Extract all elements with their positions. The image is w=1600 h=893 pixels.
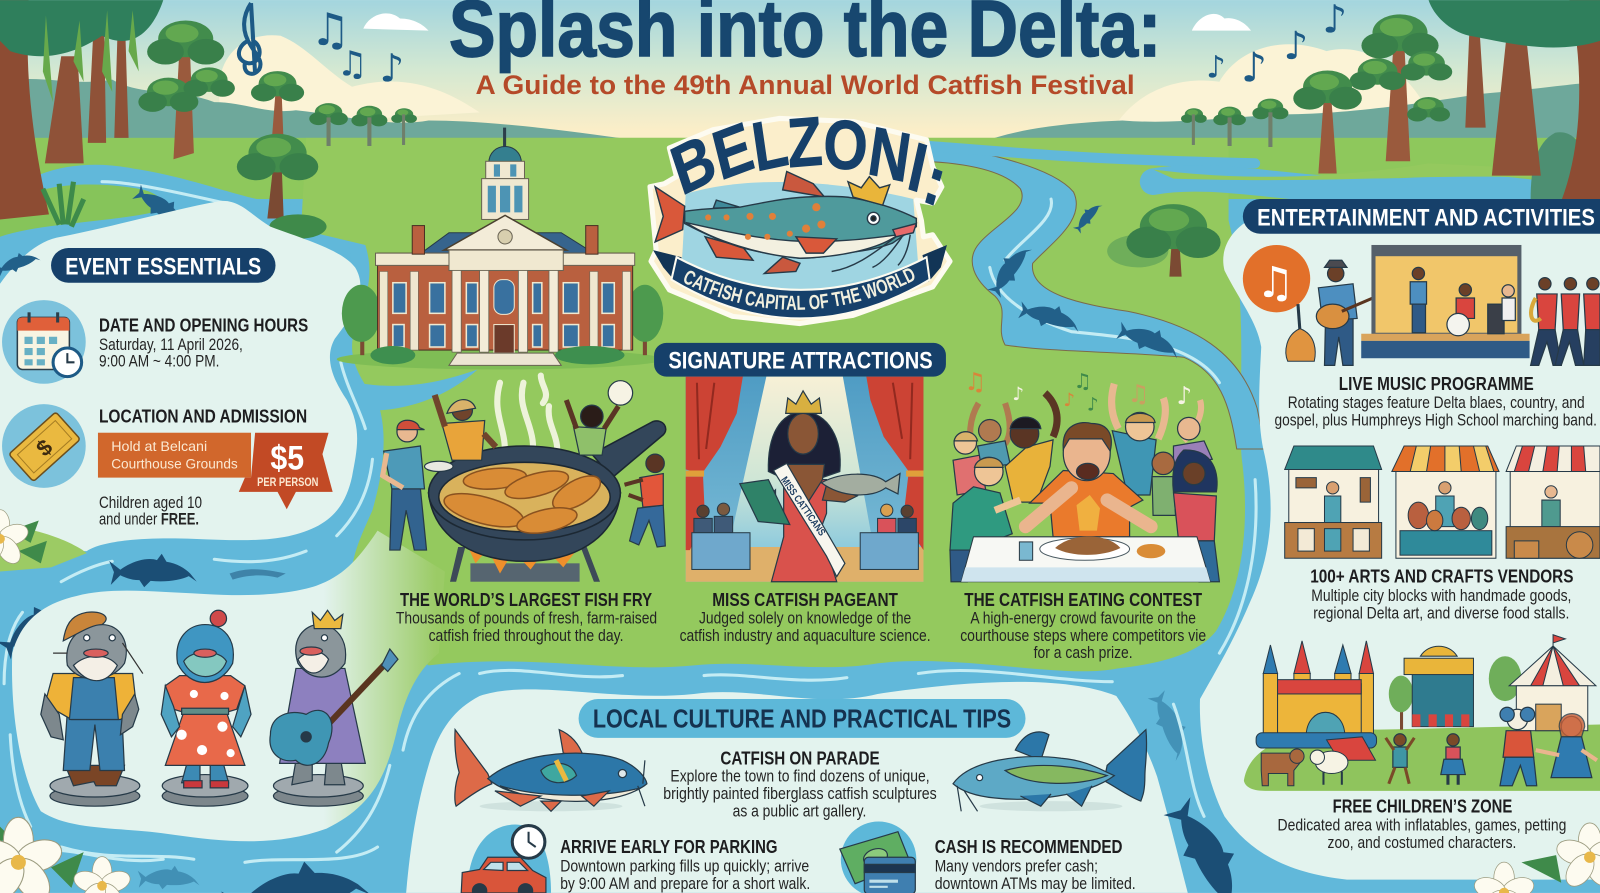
text: live music xyxy=(1274,373,1597,430)
skillet xyxy=(429,421,666,561)
caption: pageant: catfish industry and aquaculture science. xyxy=(680,627,931,645)
meadow tree right of river xyxy=(1107,204,1221,277)
background: distant treeline xyxy=(0,79,1600,163)
heading pill: event essentials xyxy=(51,248,276,283)
icon: cash and card xyxy=(840,822,916,893)
tributary stream xyxy=(342,369,478,411)
music notes right: ♪ xyxy=(1284,24,1308,69)
statue: dress catfish xyxy=(161,610,251,806)
portico xyxy=(370,215,624,365)
price badge: PER PERSON xyxy=(257,476,318,489)
table with plate xyxy=(961,537,1210,582)
wings xyxy=(376,226,635,350)
stage xyxy=(1361,247,1530,358)
person: man with hat xyxy=(435,395,496,460)
music notes: ♪ xyxy=(1177,381,1192,410)
caption: eating contest: A high-energy crowd favourite on the xyxy=(970,610,1196,628)
illustration: eating contest xyxy=(950,367,1219,582)
text: children's zone xyxy=(1278,795,1566,852)
text block: date and opening hours: DATE AND OPENING HOURS xyxy=(99,315,308,336)
illustration: vendor stalls xyxy=(1285,446,1600,558)
cupola xyxy=(482,128,529,219)
music notes left: ♫ xyxy=(337,45,368,85)
icon: ticket xyxy=(2,404,86,488)
upper right river channels xyxy=(929,146,1582,200)
banner: location: Hold at Belcani xyxy=(111,439,207,455)
caption: fish fry: THE WORLD’S LARGEST FISH FRY xyxy=(400,589,652,610)
text: catfish on parade xyxy=(663,747,937,820)
background: grass xyxy=(0,138,1600,260)
logo catfish xyxy=(655,172,916,274)
steam xyxy=(497,376,557,464)
person: woman with ball xyxy=(566,381,633,455)
stall: food cart xyxy=(1506,446,1600,558)
river fish silhouettes middle left xyxy=(0,554,286,662)
ribbon xyxy=(653,245,947,320)
music notes: ♪ xyxy=(1087,394,1098,415)
courthouse xyxy=(337,128,663,369)
illustration: pageant xyxy=(686,377,923,582)
foreground trees right xyxy=(1181,0,1600,201)
signature attractions heading: SIGNATURE ATTRACTIONS xyxy=(668,347,933,374)
illustration: fish fry xyxy=(383,376,666,582)
text: location heading: LOCATION AND ADMISSION xyxy=(99,406,307,427)
foreground trees left xyxy=(0,0,417,239)
text: vendors xyxy=(1310,566,1573,622)
central green meadow xyxy=(301,138,1245,671)
flowers bottom right xyxy=(1472,823,1600,893)
music notes left: ♫ xyxy=(310,3,350,56)
caption: pageant: Judged solely on knowledge of the xyxy=(699,610,911,628)
text: cash: CASH IS RECOMMENDED xyxy=(935,836,1122,857)
price badge xyxy=(239,433,333,509)
music notes xyxy=(964,367,1192,415)
music notes right: ♪ xyxy=(1241,44,1267,92)
caption: fish fry xyxy=(396,589,657,645)
text: catfish on parade: CATFISH ON PARADE xyxy=(720,747,880,768)
text: parking: by 9:00 AM and prepare for a short walk. xyxy=(560,875,810,893)
caption: eating contest: THE CATFISH EATING CONTEST xyxy=(964,589,1202,610)
painted fish right xyxy=(953,730,1147,811)
contestant xyxy=(1026,423,1151,537)
text: children free xyxy=(99,494,202,529)
music notes: ♫ xyxy=(1073,369,1092,393)
music notes right xyxy=(1206,0,1347,92)
judges desks xyxy=(692,503,918,569)
stall: pottery xyxy=(1392,446,1499,558)
bounce castle xyxy=(1256,641,1377,760)
water behind fish xyxy=(682,182,918,289)
text: live music: LIVE MUSIC PROGRAMME xyxy=(1339,373,1534,394)
text: catfish on parade: Explore the town to find dozens of unique, xyxy=(670,768,930,786)
icon: orange note circle xyxy=(1243,245,1310,312)
text: children free: and under FREE. xyxy=(99,511,199,529)
caption: eating contest: courthouse steps where competitors vie xyxy=(960,627,1206,645)
game booth xyxy=(1404,646,1473,727)
trees beside courthouse xyxy=(342,285,663,355)
caption: eating contest xyxy=(960,589,1206,662)
green patch with flowers left xyxy=(0,510,87,572)
ribbon: CATFISH CAPITAL OF THE WORLD xyxy=(684,268,914,310)
painted fish left xyxy=(455,730,647,811)
river highlights left xyxy=(4,362,1256,859)
music notes left xyxy=(239,3,404,92)
clown and girl xyxy=(1500,707,1597,786)
banner: location xyxy=(98,433,251,478)
badge outline xyxy=(650,118,950,324)
heading pill: event essentials: EVENT ESSENTIALS xyxy=(65,254,261,281)
trees small xyxy=(1389,656,1521,730)
pageant queen xyxy=(740,391,900,582)
statue: guitarist catfish xyxy=(270,610,398,806)
river base xyxy=(0,199,1600,893)
panel: statues of catfish xyxy=(12,531,445,841)
price badge: $5 xyxy=(270,439,304,477)
guitar xyxy=(1286,304,1315,361)
pageant queen: MISS CATTICANS xyxy=(778,475,827,538)
caption: pageant xyxy=(680,589,931,645)
banner: location: Courthouse Grounds xyxy=(111,456,238,472)
signature attractions heading xyxy=(654,343,946,377)
background: sky xyxy=(0,0,1600,153)
panel: entertainment and activities xyxy=(1200,199,1600,880)
subtitle: A Guide to the 49th Annual World Catfish Festival xyxy=(476,70,1135,100)
logo badge xyxy=(647,103,954,326)
text: cash xyxy=(935,836,1136,893)
attraction captions xyxy=(396,589,1206,662)
icon: ticket: $ xyxy=(31,434,58,461)
heading pill: LOCAL CULTURE AND PRACTICAL TIPS xyxy=(593,706,1011,734)
icon: calendar and clock xyxy=(2,300,86,384)
river fish right lower xyxy=(1145,688,1258,893)
music notes left: ♪ xyxy=(380,47,404,92)
bottom river silhouettes xyxy=(20,847,378,893)
crowd xyxy=(950,384,1219,582)
music notes: ♪ xyxy=(1012,384,1024,405)
text block: date and opening hours: 9:00 AM ~ 4:00 PM. xyxy=(99,352,219,370)
panel: local culture and practical tips xyxy=(406,682,1188,893)
text: parking xyxy=(560,836,810,893)
painted meadow islands near right bank xyxy=(1153,163,1531,180)
animals xyxy=(1261,749,1348,786)
roof xyxy=(418,233,597,255)
statue: farmer catfish xyxy=(41,612,143,806)
illustration: live music xyxy=(1243,245,1600,365)
text block: date and opening hours: Saturday, 11 April 2026, xyxy=(99,336,243,354)
text: children's zone: FREE CHILDREN’S ZONE xyxy=(1333,795,1512,816)
text: cash: Many vendors prefer cash; xyxy=(935,858,1098,876)
music notes: ♪ xyxy=(1063,390,1075,411)
panel: event essentials xyxy=(0,201,360,551)
text: catfish on parade: as a public art gallery. xyxy=(733,802,866,820)
caption: fish fry: catfish fried throughout the day. xyxy=(429,627,623,645)
icon: car and clock xyxy=(461,825,551,893)
text: parking: Downtown parking fills up quickly; arrive xyxy=(560,858,809,876)
marching band xyxy=(1531,278,1600,365)
person: cook left xyxy=(383,420,453,550)
guitarist xyxy=(1316,260,1378,365)
text: children free: Children aged 10 xyxy=(99,494,202,512)
flowers bottom left xyxy=(0,817,133,893)
icon: orange note circle: ♫ xyxy=(1256,258,1295,308)
heading pill xyxy=(579,699,1026,738)
music notes right: ♪ xyxy=(1206,51,1226,86)
illustration: children's zone xyxy=(1244,635,1600,791)
text: cash: downtown ATMs may be limited. xyxy=(935,875,1136,893)
caption: pageant: MISS CATFISH PAGEANT xyxy=(712,589,898,610)
text block: date and opening hours xyxy=(99,315,308,370)
text: children's zone: zoo, and costumed characters. xyxy=(1328,834,1516,852)
text: parking: ARRIVE EARLY FOR PARKING xyxy=(560,836,778,857)
striped tent xyxy=(1509,635,1596,731)
music notes: ♫ xyxy=(964,367,986,396)
stall: leather and crafts xyxy=(1285,446,1382,558)
caption: eating contest: for a cash prize. xyxy=(1034,644,1133,662)
stand and flames xyxy=(450,541,600,582)
person: man in red xyxy=(624,454,665,547)
music notes: ♫ xyxy=(1128,379,1149,408)
caption: fish fry: Thousands of pounds of fresh, farm-raised xyxy=(396,610,657,628)
children xyxy=(1386,734,1465,785)
upper left river channel xyxy=(0,143,676,306)
central river channel with fish xyxy=(923,143,1265,449)
logo word: BELZONI: xyxy=(663,103,954,222)
text: catfish on parade: brightly painted fiberglass catfish sculptures xyxy=(663,785,937,803)
